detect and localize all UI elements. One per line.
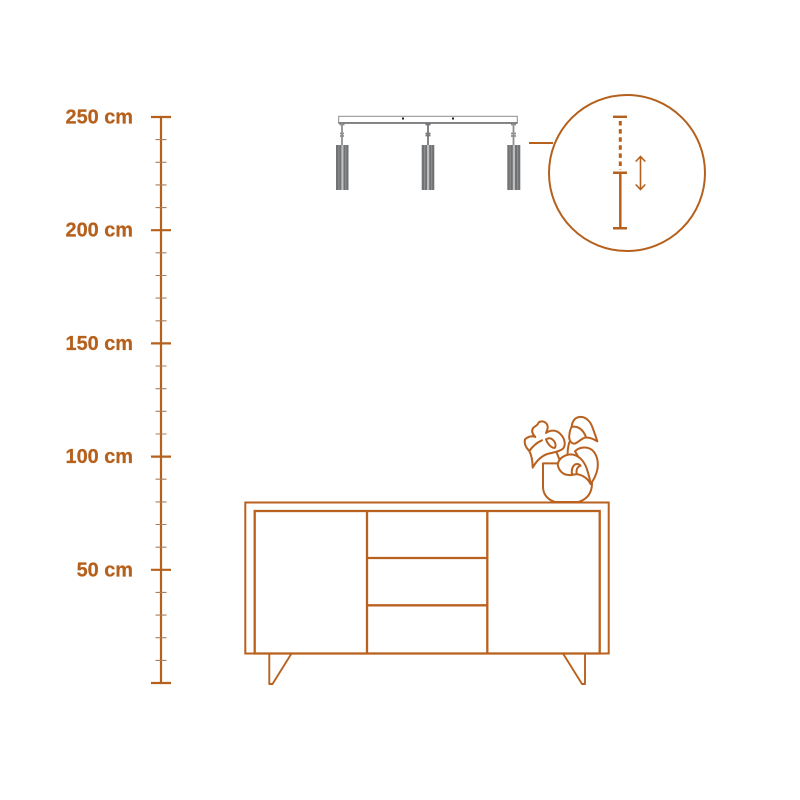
lower right leaf front bbox=[558, 454, 591, 484]
left cylinder bbox=[336, 145, 348, 190]
left leaf bbox=[525, 421, 565, 468]
left leg bbox=[269, 654, 292, 684]
left leaf vein bbox=[546, 438, 556, 448]
right cord bbox=[511, 123, 516, 145]
height scale ruler bbox=[151, 117, 171, 683]
label 150 cm: 150 cm bbox=[66, 333, 133, 355]
callout leader line bbox=[529, 142, 553, 144]
right cylinder bbox=[507, 145, 520, 190]
right leg bbox=[563, 654, 585, 684]
sideboard cabinet bbox=[245, 502, 609, 684]
lower leaf notch bbox=[572, 464, 581, 475]
top right leaf bbox=[569, 417, 597, 444]
label 200 cm: 200 cm bbox=[66, 220, 133, 242]
callout circle bbox=[549, 95, 705, 251]
centre cord bbox=[426, 123, 430, 145]
scale spine bbox=[160, 117, 162, 683]
centre cylinder bbox=[422, 145, 434, 190]
drawers column bbox=[367, 511, 487, 654]
stems bbox=[556, 442, 569, 462]
cabinet outer frame bbox=[245, 502, 609, 654]
left leaf notch bbox=[529, 440, 542, 451]
pot bbox=[543, 463, 592, 502]
solid minimum cord bbox=[613, 173, 627, 228]
scale labels bbox=[66, 106, 133, 582]
label 50 cm: 50 cm bbox=[77, 560, 133, 582]
ceiling canopy bar bbox=[339, 116, 517, 123]
major ticks bbox=[151, 117, 171, 683]
potted monstera plant bbox=[525, 417, 598, 502]
label 250 cm: 250 cm bbox=[66, 106, 133, 128]
pendant lamp with three spotlights bbox=[336, 116, 520, 190]
callout: adjustable cord length bbox=[529, 95, 705, 251]
left cord bbox=[340, 123, 344, 145]
cabinet inner frame bbox=[255, 511, 600, 654]
minor ticks bbox=[156, 140, 166, 660]
label 100 cm: 100 cm bbox=[66, 446, 133, 468]
lower right leaf back bbox=[575, 447, 598, 484]
double arrow bbox=[636, 156, 645, 190]
dashed extended cord bbox=[613, 117, 627, 170]
